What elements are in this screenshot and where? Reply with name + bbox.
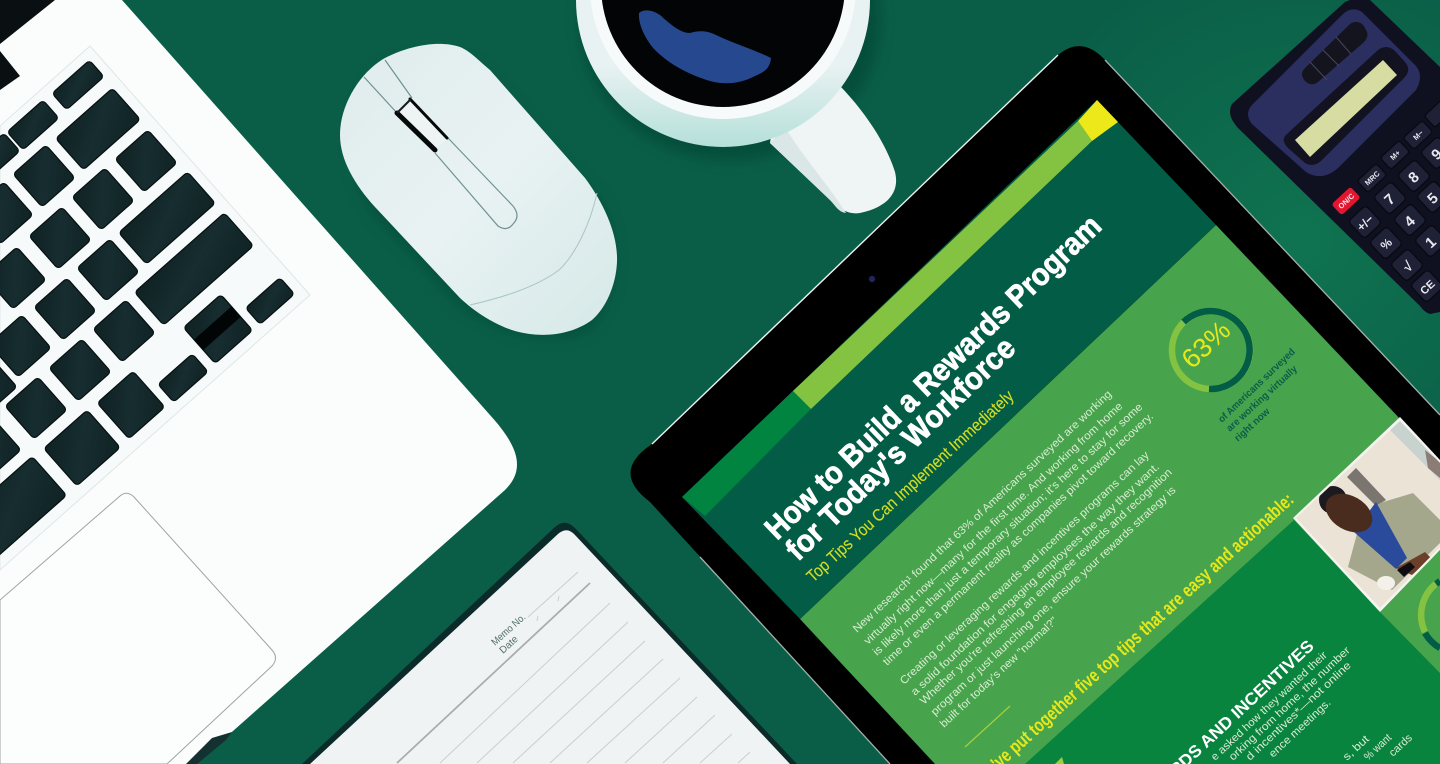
tip body paragraph one: d incentives*—not online <box>1244 660 1354 763</box>
calculator body <box>1230 0 1440 314</box>
photo coffee cup <box>1377 576 1395 590</box>
stat ring 63% <box>1172 311 1250 389</box>
photo hand <box>1396 552 1431 575</box>
intro paragraph one: time or even a permanent reality as companies pivot toward recovery. <box>881 410 1156 668</box>
tip body paragraph two <box>1341 732 1415 763</box>
accent bar light green <box>793 121 1092 409</box>
intro paragraph two: a solid foundation for engaging employees the way they want. <box>909 461 1162 698</box>
intro paragraph two: Whether you're refreshing an employee rewards and recognition <box>918 467 1175 707</box>
calculator faceplate <box>1248 9 1420 176</box>
intro paragraph two: program or just launching one, ensure your rewards strategy is <box>929 484 1179 718</box>
calculator button labels: 1 <box>1422 234 1440 252</box>
intro paragraph one: New research¹ found that 63% of Americans surveyed are working <box>851 388 1114 635</box>
title: How to Build a Rewards Program <box>758 208 1108 546</box>
calculator <box>1230 0 1440 314</box>
small accent tick <box>1055 757 1064 764</box>
screen base green panel <box>800 225 1440 764</box>
notebook header rule <box>397 583 590 763</box>
stat caption: are working virtually <box>1225 364 1300 434</box>
stat caption: of Americans surveyed <box>1216 347 1298 425</box>
cup handle <box>770 80 896 213</box>
tip body paragraph one: ence meetings. <box>1267 697 1334 760</box>
calculator button labels: 4 <box>1401 212 1419 231</box>
tip body paragraph two: s, but <box>1341 733 1372 763</box>
calculator button labels: +/− <box>1354 212 1376 234</box>
tip body paragraph one: e asked how they wanted their <box>1209 649 1330 763</box>
stat value: 63% <box>1176 315 1236 374</box>
laptop screen edge <box>0 0 55 90</box>
tip body paragraph one: orking from home, the number <box>1227 644 1353 763</box>
calculator buttons <box>1348 98 1440 303</box>
calculator button labels: 8 <box>1405 169 1423 187</box>
calculator button labels: CE <box>1418 278 1438 297</box>
photo content <box>1296 421 1440 608</box>
date label: Date <box>498 634 521 656</box>
calculator button labels <box>1336 128 1440 297</box>
photo scarf <box>1354 502 1407 569</box>
accent bar dark green <box>682 391 811 516</box>
tablet side edge highlight <box>700 60 1440 764</box>
calculator button labels: √ <box>1399 258 1416 275</box>
memo number label: Memo No. <box>490 612 528 648</box>
mouse body <box>340 44 617 335</box>
header band <box>682 100 1216 619</box>
split key stripe <box>194 306 241 350</box>
tip body paragraph two: % want <box>1362 732 1394 763</box>
coffee reflection <box>639 10 771 83</box>
mouse lower seam <box>470 193 597 305</box>
ON/C red button <box>1331 187 1361 215</box>
keyboard keys <box>0 60 295 562</box>
tablet frame <box>630 46 1440 764</box>
intro paragraph two: built for today's new "normal?" <box>938 615 1060 730</box>
coffee cup <box>576 0 896 213</box>
notebook <box>302 523 797 764</box>
calculator button labels: MRC <box>1363 169 1382 187</box>
tablet camera <box>869 276 875 282</box>
keyboard well <box>0 46 310 570</box>
photo white border <box>1293 417 1440 612</box>
coffee surface <box>601 0 845 107</box>
mouse scroll slot <box>364 60 517 229</box>
calculator LCD <box>1295 60 1397 157</box>
trackpad <box>0 493 276 764</box>
lower dark green panel <box>1025 520 1440 764</box>
title: for Today's Workforce <box>779 330 1022 567</box>
intro paragraph one: virtually right now—many for the first time. And working from home <box>862 400 1125 647</box>
tip body paragraph two: cards <box>1387 732 1415 759</box>
photo hair <box>1319 486 1346 512</box>
intro paragraph one: is likely more than just a temporary situation; it's here to stay for some <box>871 401 1145 658</box>
tablet <box>630 46 1440 764</box>
tablet edge highlight <box>652 55 1058 444</box>
subtitle: Top Tips You Can Implement Immediately <box>803 386 1018 586</box>
cup handle inner shading <box>770 127 846 213</box>
cup shadow <box>580 0 880 160</box>
laptop <box>0 0 517 764</box>
cup rim <box>590 0 856 119</box>
intro paragraph two <box>898 449 1179 730</box>
divider line <box>965 706 1010 747</box>
calculator display surround <box>1284 47 1408 165</box>
photo phone <box>1397 562 1415 577</box>
mouse shadow <box>353 58 614 338</box>
calculator button labels: % <box>1378 235 1395 253</box>
partial second stat ring <box>1383 550 1440 673</box>
tablet screen <box>682 100 1440 764</box>
calculator button labels: 7 <box>1381 191 1399 209</box>
mouse wheel <box>397 98 448 150</box>
intro paragraph two: Creating or leveraging rewards and incentives programs can lay <box>898 449 1152 687</box>
stat caption: right now <box>1233 406 1273 444</box>
calculator button labels: ON/C <box>1336 191 1357 211</box>
employee photo <box>1290 410 1440 615</box>
cup body <box>576 0 870 147</box>
notebook page <box>310 530 790 764</box>
notebook cover <box>302 523 797 764</box>
accent bar yellow <box>1078 100 1118 141</box>
notebook ruled lines <box>440 572 750 763</box>
photo head <box>1326 494 1372 532</box>
mouse <box>340 44 617 338</box>
calculator solar panel <box>1302 22 1367 84</box>
photo jacket <box>1348 493 1440 590</box>
calculator button labels: M− <box>1411 128 1426 142</box>
laptop hinge tip <box>186 732 232 764</box>
calculator button labels: M+ <box>1388 148 1403 162</box>
